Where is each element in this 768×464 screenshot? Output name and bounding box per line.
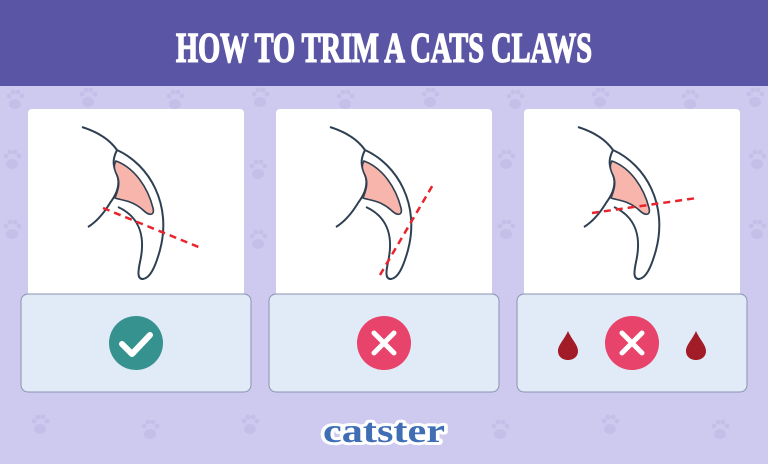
claw illustration 2 — [330, 127, 411, 279]
logo: catster: catster — [323, 413, 445, 450]
claw illustration 3 — [578, 127, 659, 279]
icon: blood drop left — [558, 331, 578, 360]
icon: cross — [357, 316, 411, 370]
icon: cross 3 — [605, 316, 659, 370]
panel: wrong angle — [269, 109, 499, 392]
panel: correct cut — [21, 109, 251, 392]
cut line 1 — [103, 208, 201, 248]
panel: cut into quick — [517, 109, 747, 392]
cut line 3 — [592, 198, 697, 213]
icon: check — [109, 316, 163, 370]
background paws — [4, 88, 766, 439]
icon: blood drop right — [686, 331, 706, 360]
claw illustration 1 — [82, 127, 163, 279]
header bar — [0, 0, 768, 86]
cut line 2 — [380, 183, 434, 275]
